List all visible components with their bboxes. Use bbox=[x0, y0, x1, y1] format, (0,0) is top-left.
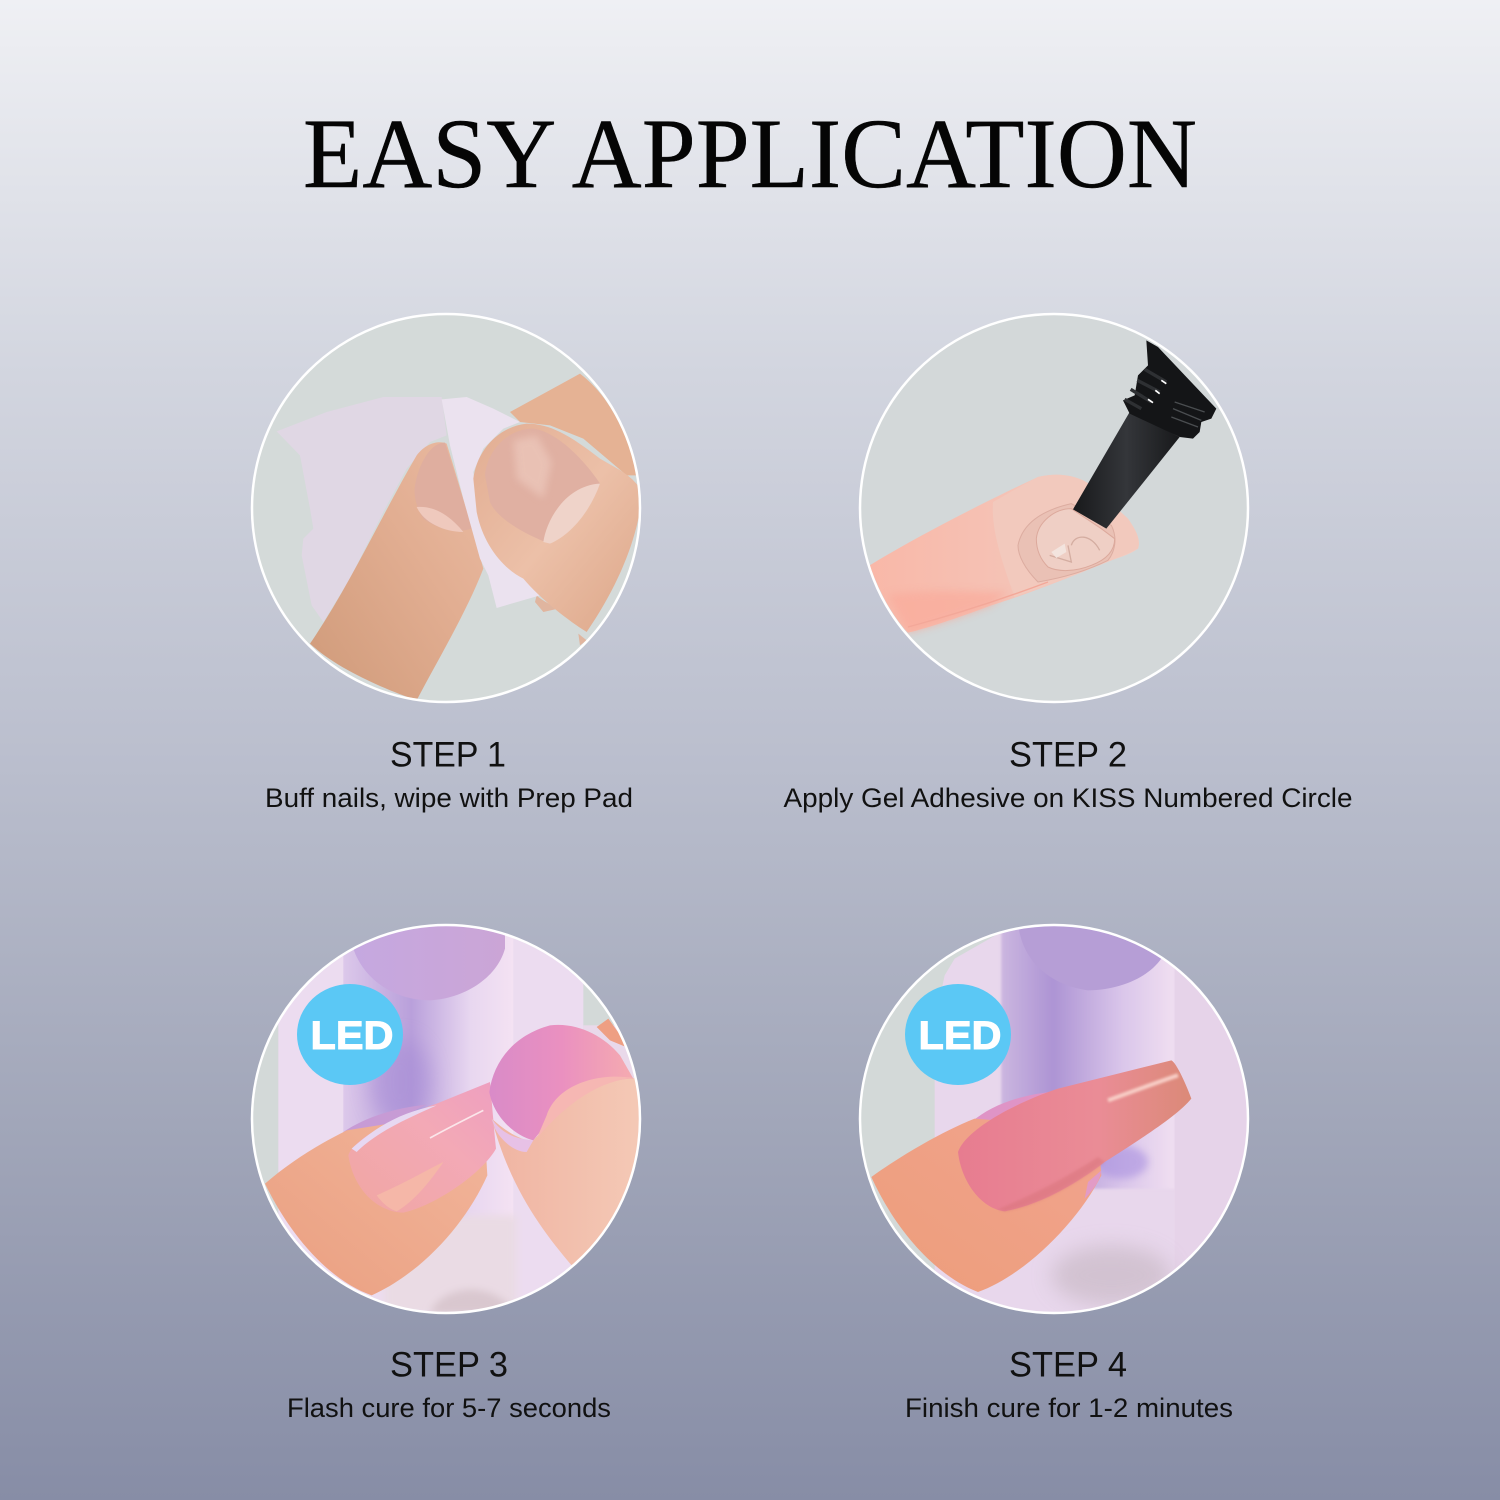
LED badge bbox=[297, 984, 403, 1085]
title: EASY APPLICATION bbox=[303, 98, 1197, 209]
step label: STEP 4 bbox=[1009, 1344, 1127, 1384]
circle outline bbox=[252, 925, 640, 1313]
step label: STEP 2 bbox=[1009, 734, 1127, 774]
caption: Flash cure for 5-7 seconds bbox=[287, 1393, 611, 1423]
LED badge: LED bbox=[310, 1014, 394, 1058]
circle outline bbox=[860, 314, 1248, 702]
LED badge bbox=[905, 984, 1011, 1085]
LED badge: LED bbox=[918, 1014, 1002, 1058]
step label: STEP 1 bbox=[390, 734, 506, 774]
panel: step 2 bbox=[784, 312, 1352, 813]
circle outline bbox=[252, 314, 640, 702]
panel: step 3 bbox=[250, 922, 642, 1423]
illustration: flash curing nail in LED lamp bbox=[250, 922, 642, 1314]
circle outline bbox=[860, 925, 1248, 1313]
illustration: finish curing nail in LED lamp bbox=[858, 922, 1250, 1314]
caption: Finish cure for 1-2 minutes bbox=[905, 1393, 1233, 1423]
caption: Buff nails, wipe with Prep Pad bbox=[265, 783, 633, 813]
panel: step 1 bbox=[250, 312, 642, 813]
panel: step 4 bbox=[858, 922, 1250, 1423]
caption: Apply Gel Adhesive on KISS Numbered Circle bbox=[784, 783, 1352, 813]
step label: STEP 3 bbox=[390, 1344, 508, 1384]
illustration: wiping nail with prep pad bbox=[250, 312, 642, 704]
illustration: applying gel adhesive with tube nozzle bbox=[858, 312, 1250, 704]
